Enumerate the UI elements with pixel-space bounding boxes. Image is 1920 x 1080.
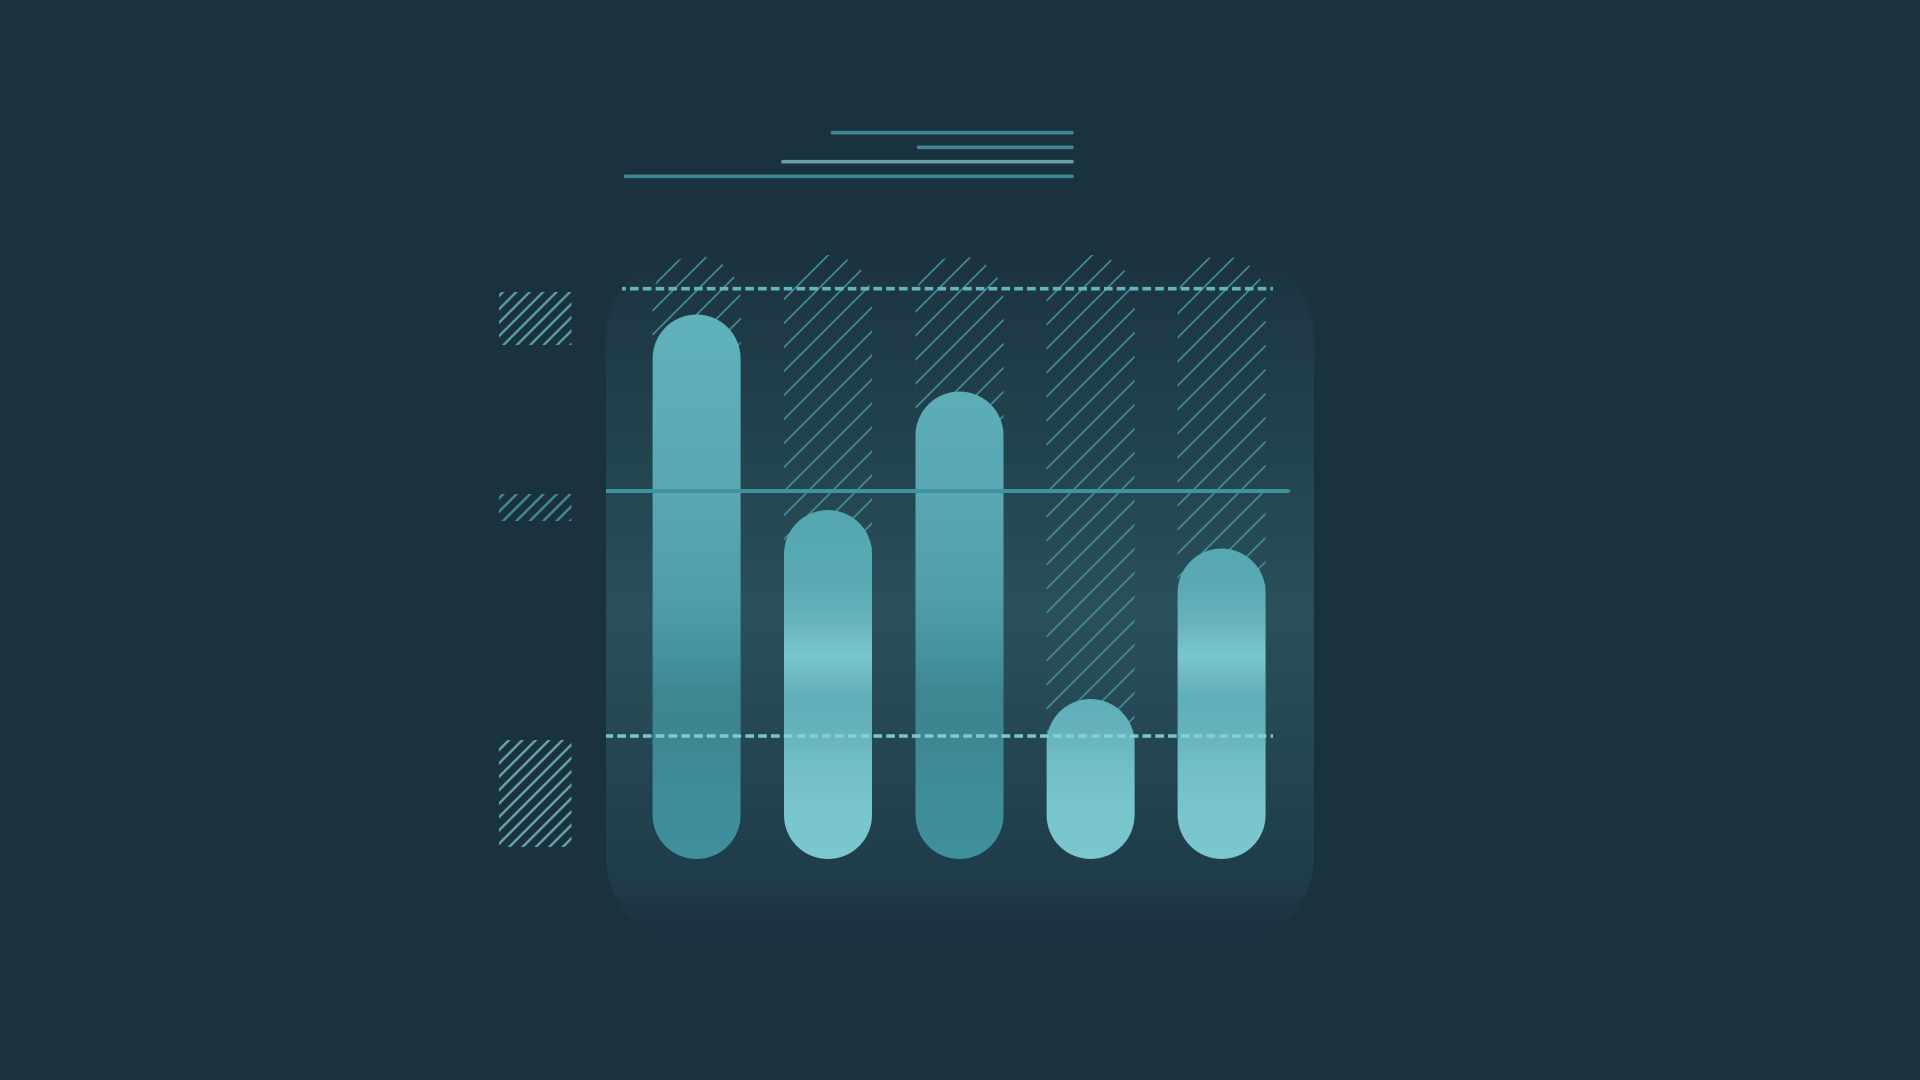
swatch: middle hatch <box>499 494 572 521</box>
legend swatches <box>499 292 572 847</box>
panel: chart background <box>606 250 1314 945</box>
bar 2 <box>784 510 872 859</box>
hatch column 5 <box>1178 256 1266 859</box>
hatch column 2 <box>784 255 872 859</box>
hatch column 3 <box>916 256 1004 859</box>
top line 4 <box>626 175 1072 178</box>
bar 5 <box>1178 548 1266 859</box>
top line 2 <box>918 146 1072 149</box>
top lines group <box>626 133 1072 176</box>
lower dashed reference line <box>606 734 1273 738</box>
swatch: bottom hatch <box>499 740 572 847</box>
bars <box>653 314 1266 859</box>
top dashed reference line <box>622 287 1273 291</box>
top line 3 <box>783 160 1072 163</box>
bar 3 <box>916 392 1004 859</box>
swatch: top hatch <box>499 292 572 345</box>
hatch column 4 <box>1047 255 1135 859</box>
bar 4 <box>1047 699 1135 859</box>
bar 1 <box>653 314 741 859</box>
hatched column backgrounds <box>653 255 1266 859</box>
hatch column 1 <box>653 256 741 859</box>
middle solid reference line <box>606 489 1291 493</box>
top line 1 <box>832 131 1072 134</box>
